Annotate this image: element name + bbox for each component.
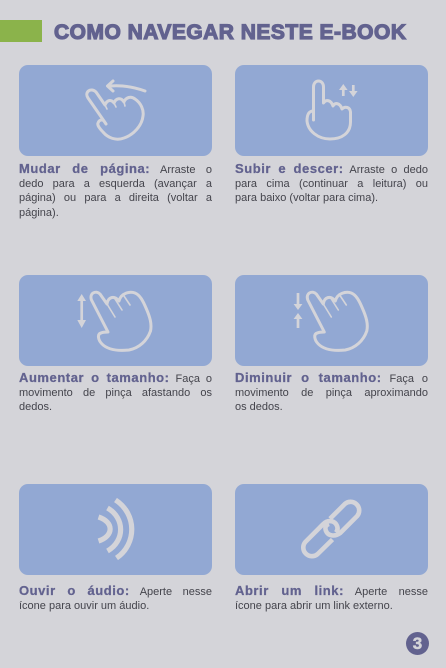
panel: ouvir o áudio icon	[19, 484, 212, 575]
text: subir e descer: para cima (continuar a leitura) ou	[235, 178, 428, 190]
page number badge	[406, 632, 429, 655]
text: subir e descer: para baixo (voltar para cima).	[235, 192, 378, 204]
text: diminuir o tamanho: movimento de pinça aproximando	[235, 386, 428, 398]
text: subir e descer	[235, 161, 428, 204]
icon: interlocked chain links	[303, 502, 359, 556]
panel: diminuir o tamanho icon	[235, 275, 428, 366]
page number badge: 3	[413, 634, 422, 653]
text: mudar de página: página).	[19, 206, 59, 218]
text: aumentar o tamanho	[19, 370, 212, 413]
icon: pinch hand with arrows apart	[77, 292, 151, 350]
text: abrir um link: ícone para abrir um link externo.	[235, 600, 393, 612]
panel: mudar de página icon	[19, 65, 212, 156]
text: abrir um link	[235, 583, 428, 612]
text: diminuir o tamanho	[235, 370, 428, 413]
icon: hand swiping left	[87, 81, 145, 139]
icon: hand with up and down arrows	[307, 81, 358, 139]
text: mudar de página: dedo para a esquerda (avançar a	[19, 178, 212, 190]
text: diminuir o tamanho: os dedos.	[235, 401, 283, 413]
panel: subir e descer icon	[235, 65, 428, 156]
panel: abrir um link icon	[235, 484, 428, 575]
text: subir e descer: Subir e descer: Arraste o dedo	[235, 161, 428, 176]
text: ouvir o áudio: Ouvir o áudio: Aperte nesse	[19, 583, 212, 598]
text: ouvir o áudio	[19, 583, 212, 612]
text: mudar de página	[19, 161, 212, 218]
text: abrir um link: Abrir um link: Aperte nesse	[235, 583, 428, 598]
text: aumentar o tamanho: Aumentar o tamanho: Faça o	[19, 370, 212, 385]
icon: sound waves	[98, 500, 132, 558]
text: mudar de página: Mudar de página: Arraste o	[19, 161, 212, 176]
text: aumentar o tamanho: movimento de pinça afastando os	[19, 386, 212, 398]
icon: pinch hand with arrows together	[294, 292, 367, 350]
text: mudar de página: página) ou para a direita (voltar a	[19, 192, 212, 204]
text: aumentar o tamanho: dedos.	[19, 401, 52, 413]
green title tab	[0, 20, 42, 42]
title: COMO NAVEGAR NESTE E-BOOK	[54, 21, 406, 44]
text: ouvir o áudio: ícone para ouvir um áudio.	[19, 600, 149, 612]
panel: aumentar o tamanho icon	[19, 275, 212, 366]
text: diminuir o tamanho: Diminuir o tamanho: Faça o	[235, 370, 428, 385]
